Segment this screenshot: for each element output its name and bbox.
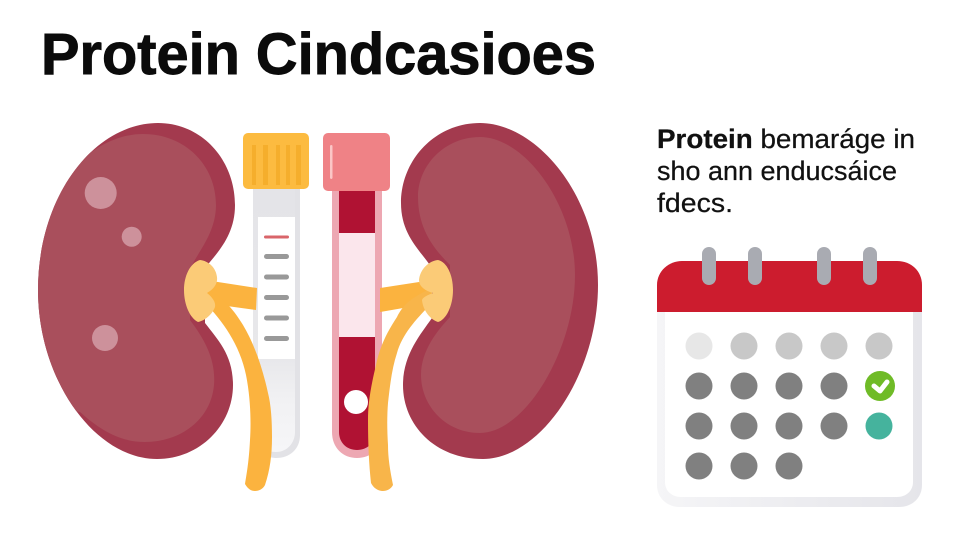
description text: sho ann enducsáice	[657, 156, 897, 186]
description text: fdecs.	[657, 188, 733, 218]
left kidney	[20, 123, 235, 459]
left ureter	[184, 260, 272, 491]
calendar header	[657, 261, 922, 312]
test strip	[258, 217, 295, 359]
title: Protein Cindcasioes	[41, 22, 596, 87]
calendar rings	[702, 247, 877, 285]
calendar day dots	[686, 332, 892, 480]
right kidney	[401, 123, 598, 459]
right renal pelvis	[419, 260, 453, 322]
blood tube	[323, 133, 390, 458]
blood tube cap	[323, 133, 390, 191]
right ureter	[368, 260, 453, 491]
urine test tube	[243, 133, 309, 458]
left renal pelvis	[184, 260, 217, 322]
icon: green check	[865, 371, 895, 401]
description text: Protein bemaráge in	[657, 124, 910, 154]
tube cap	[243, 133, 309, 189]
calendar	[657, 247, 922, 507]
